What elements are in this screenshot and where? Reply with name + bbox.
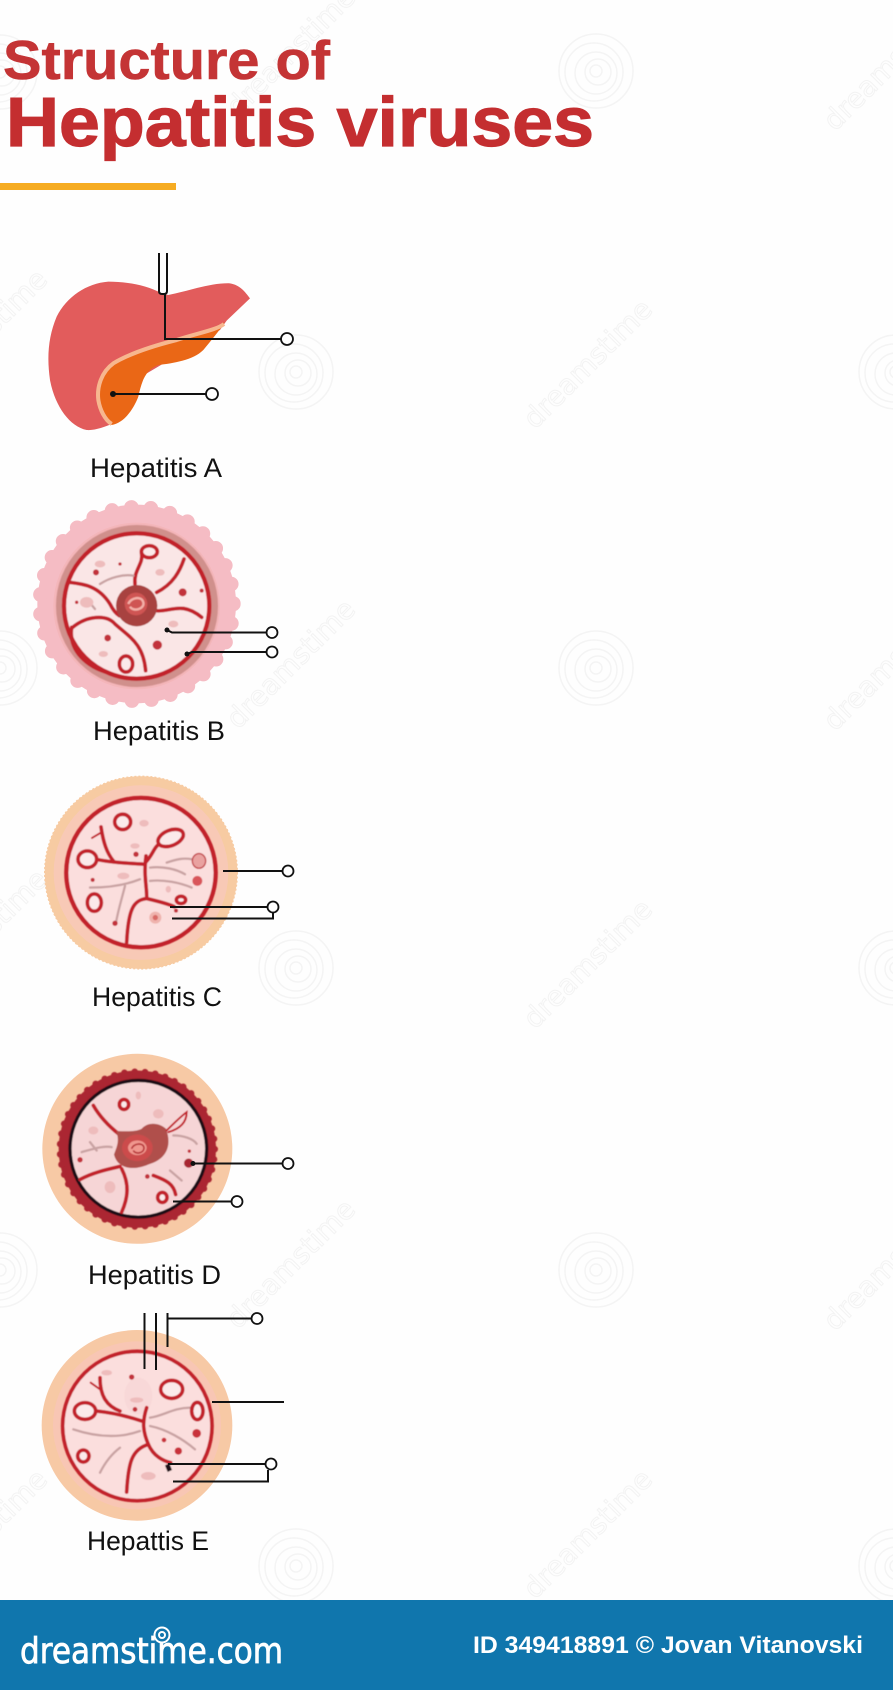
footer logo: dreamstime.com [20,1631,283,1672]
icon: logo spiral [154,1628,170,1642]
panel: Hepatitis D [42,1054,293,1290]
title line 1: Structure of [3,29,331,91]
footer bar [0,1600,893,1690]
icon: virus cross-section D [42,1054,232,1244]
title line 2: Hepatitis viruses [6,83,594,161]
callout lines: B [164,627,278,658]
callout lines: liver [110,253,293,400]
label: Hepatitis D: Hepatitis D [88,1260,221,1290]
panel: Hepatitis B [37,505,278,746]
watermark pattern: dreamstime [517,1463,659,1605]
icon: liver [48,282,250,430]
panel: Hepatitis C [45,776,293,1012]
icon: virus cross-section B [37,505,236,703]
panel: Hepatitis A [48,253,293,483]
icon: virus cross-section C [45,776,237,969]
watermark pattern: dreamstime [517,293,659,435]
footer credit: ID 349418891 © Jovan Vitanovski [473,1632,863,1659]
title [3,29,594,161]
panel: Hepatitis E [42,1313,284,1556]
watermark pattern: dreamstime [220,1193,362,1335]
label: Hepatitis A: Hepatitis A [90,453,222,483]
callout lines: D [173,1158,294,1207]
watermark pattern: dreamstime [220,593,362,735]
callout lines: E [144,1313,284,1482]
label: Hepatitis C: Hepatitis C [92,982,222,1012]
label: Hepattis E: Hepattis E [87,1526,209,1556]
callout lines: C [170,866,294,918]
watermark pattern: dreamstime [517,893,659,1035]
icon: virus cross-section E [42,1330,232,1521]
label: Hepatitis B: Hepatitis B [93,716,225,746]
title accent bar [0,183,176,190]
